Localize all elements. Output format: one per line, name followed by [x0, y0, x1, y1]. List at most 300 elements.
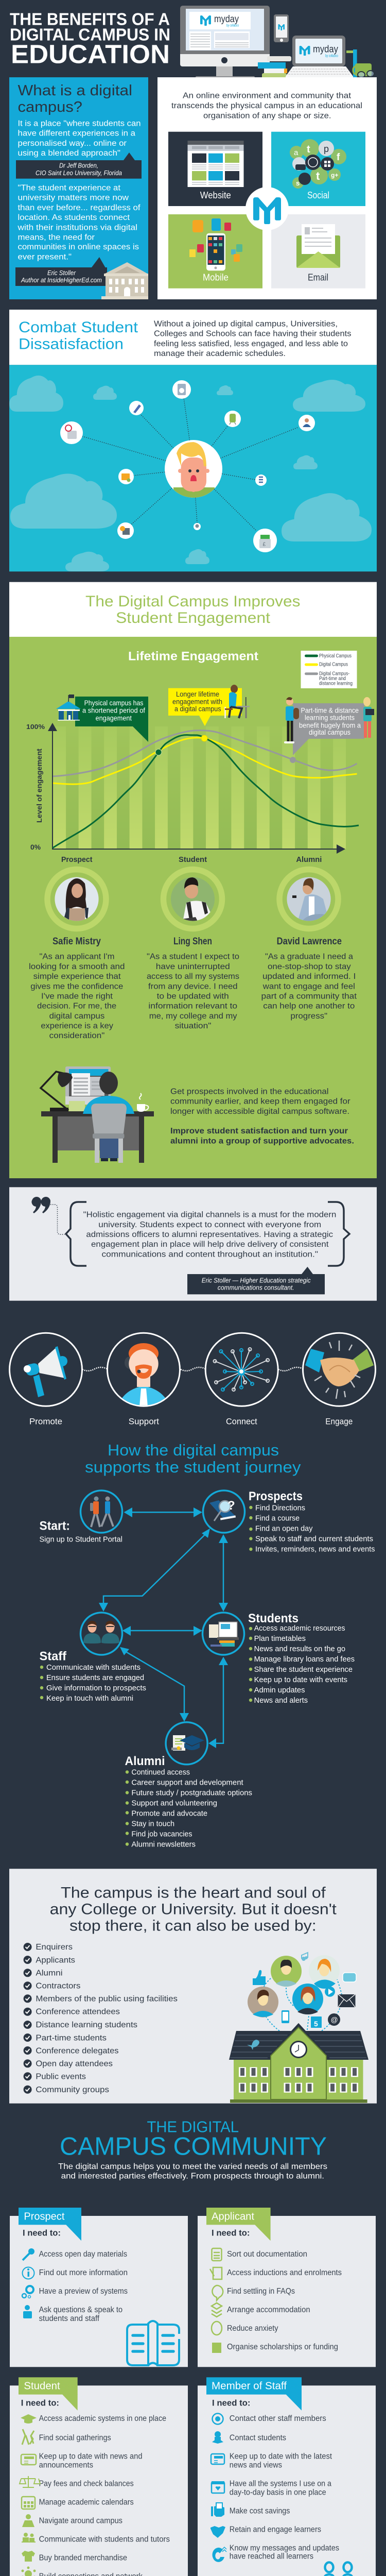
- card: member of staff: [198, 2377, 376, 2576]
- callout: part-time and distance: Part-time & distance: [301, 706, 359, 714]
- list: applicant needs: Reduce anxiety: [227, 2324, 278, 2333]
- icon: megaphone: [9, 1333, 82, 1406]
- icon: support agent: [107, 1333, 180, 1406]
- callout: Dr Jeff Borden: [16, 152, 142, 179]
- text block: staff: Staff: [39, 1650, 67, 1664]
- icon: train: [224, 411, 241, 427]
- panel: engagement heading: [9, 582, 377, 637]
- dotted connector: [50, 1205, 65, 1234]
- quote: experience is a key: [41, 1022, 113, 1030]
- list: student needs: [39, 2414, 170, 2576]
- list: prospect needs: Ask questions & speak to: [39, 2306, 122, 2314]
- label: I need to: I need to:: [212, 2398, 250, 2408]
- list: student needs: Manage academic calendars: [39, 2498, 134, 2507]
- tile: email: [271, 214, 365, 289]
- tile: website: Website: [200, 190, 231, 200]
- panel: online environment: [157, 77, 377, 299]
- name: Ling Shen: [173, 936, 212, 947]
- icons: staff needs: [210, 2413, 226, 2562]
- text block: prospects: [249, 1489, 375, 1554]
- panel: lifetime engagement: [9, 637, 377, 1178]
- title: DIGITAL CAMPUS IN: [10, 25, 170, 44]
- portrait: [47, 870, 106, 928]
- card: prospect: [10, 2208, 188, 2367]
- text block: alumni: Promote and advocate: [131, 1809, 207, 1818]
- text block: get prospects involved: longer with accessible digital campus software.: [170, 1107, 349, 1116]
- text block: student experience quote: ever present.": [17, 252, 72, 261]
- icon: pencil: [129, 401, 144, 415]
- icon: student with backpack: [284, 697, 299, 743]
- quote: [147, 953, 239, 1030]
- stage labels: Student: [179, 855, 207, 864]
- heading: digital campus improves student engagement: Student Engagement: [116, 609, 271, 626]
- icon: money wallet: £: [262, 542, 266, 547]
- axes: [26, 723, 345, 854]
- legend: Part-time and: [319, 675, 346, 682]
- node: start: [80, 1490, 122, 1533]
- list: staff needs: Contact other staff members: [230, 2414, 326, 2423]
- text block: Borden quote: have different experiences in a: [17, 129, 135, 138]
- flow arrowheads: [99, 1507, 228, 1748]
- checklist: Contractors: [36, 1982, 80, 1991]
- list: student needs: Buy branded merchandise: [39, 2554, 127, 2563]
- text block: prospects: Find Directions: [255, 1504, 305, 1513]
- quote: digital campus: [49, 1012, 105, 1021]
- tag: student: [19, 2377, 78, 2411]
- list: student needs: Navigate around campus: [39, 2517, 122, 2526]
- icon: washing machine: [172, 380, 191, 399]
- hero illustration: devices: by collabco: [226, 24, 239, 28]
- text block: prospects: Invites, reminders, news and events: [255, 1545, 375, 1554]
- heading: digital campus improves student engagement: [85, 593, 301, 626]
- callout: digital campus: [168, 688, 242, 726]
- name: David Lawrence: [277, 936, 342, 947]
- hero illustration: devices: [180, 6, 374, 79]
- callout: physical campus: Physical campus has: [84, 699, 143, 707]
- heading: combat student dissatisfaction: Dissatisfaction: [19, 335, 124, 352]
- tag: student: Student: [24, 2380, 60, 2392]
- chart markers: [155, 735, 296, 763]
- text block: community intro: and interested parties effectively. From prospects through to alumni.: [61, 2172, 324, 2180]
- heading: the digital campus community: [60, 2117, 327, 2161]
- axes: Level of engagement: [35, 749, 43, 823]
- heading: student journey: [85, 1441, 301, 1476]
- list: applicant needs: Find settling in FAQs: [227, 2287, 295, 2296]
- stage labels: Alumni: [296, 855, 322, 864]
- text block: prospects: Speak to staff and current students: [255, 1535, 373, 1544]
- text block: student experience quote: location. As students connect: [17, 213, 130, 222]
- curve: digital campus: [53, 738, 357, 784]
- text block: student experience quote: means, the need for: [17, 233, 95, 242]
- text block: students: Plan timetables: [254, 1634, 306, 1643]
- text block: get prospects involved: alumni into a group of supportive advocates.: [170, 1137, 354, 1145]
- quote: gives me the confidence: [30, 982, 123, 991]
- callout: physical campus: a shortened period of: [82, 706, 145, 715]
- text block: without a joined up campus: feeling less satisfied, less engaged, and less able to: [154, 340, 348, 348]
- tag: member of staff: Member of Staff: [212, 2380, 287, 2392]
- quote: have uninterrupted: [156, 962, 230, 971]
- legend: distance learning: [319, 680, 353, 686]
- legend: [301, 651, 357, 688]
- quote: access to all my systems: [147, 972, 239, 981]
- text block: Borden quote: using a blended approach": [17, 149, 120, 158]
- icon: calendar and clock: [60, 421, 83, 444]
- tag: prospect: Prospect: [24, 2211, 65, 2222]
- quote: consideration": [49, 1031, 104, 1040]
- checklist: Members of the public using facilities: [36, 1995, 178, 2004]
- illustration: person at desk: [41, 1066, 154, 1163]
- text block: definition: transcends the physical campus in an educational: [171, 101, 362, 110]
- list: staff needs: Contact students: [230, 2434, 286, 2443]
- text block: prospects: Find an open day: [255, 1524, 313, 1533]
- tile: social: p: [324, 144, 329, 154]
- panel: combat student dissatisfaction: [9, 310, 377, 365]
- label: support: Support: [129, 1416, 159, 1426]
- heading: what is a digital campus: [17, 82, 132, 115]
- quote: me, my college and my: [149, 1012, 237, 1021]
- list: student needs: Communicate with students and tutors: [39, 2535, 170, 2544]
- tile: social: g+: [331, 172, 338, 179]
- quote: situation": [175, 1022, 211, 1030]
- text block: staff: Communicate with students: [46, 1663, 141, 1672]
- hero illustration: devices: by collabco: [325, 55, 338, 58]
- tile: social: [271, 132, 365, 206]
- list: prospect needs: students and staff: [39, 2314, 100, 2323]
- quote: from any device. I need: [148, 982, 238, 991]
- callout: digital campus: Longer lifetime: [176, 690, 219, 698]
- curve: physical campus: [52, 735, 359, 848]
- list: applicant needs: Arrange accommodation: [227, 2306, 310, 2314]
- axes: 0%: [30, 843, 41, 851]
- icon: stressed student: [165, 440, 222, 500]
- text block: community intro: The digital campus helps you to meet the varied needs of all members: [58, 2162, 327, 2171]
- text block: holistic quote: communications and content throughout an institution.": [102, 1250, 318, 1259]
- heading: the digital campus community: THE DIGITAL: [147, 2117, 239, 2136]
- node: prospects: [203, 1490, 245, 1533]
- list: staff needs: Retain and engage learners: [230, 2525, 321, 2534]
- community connections: [263, 1978, 342, 2031]
- tile: social: t: [316, 170, 320, 182]
- stage labels: [61, 855, 322, 864]
- checklist: Alumni: [36, 1969, 63, 1978]
- portrait: [164, 870, 222, 928]
- text block: staff: Give information to prospects: [46, 1684, 146, 1692]
- heading: the digital campus community: CAMPUS COMMUNITY: [60, 2133, 327, 2161]
- label: engage: Engage: [325, 1416, 353, 1426]
- curve: digital part-time: [53, 731, 357, 776]
- list: staff needs: news and views: [230, 2461, 282, 2470]
- persona: Ling Shen: [147, 870, 239, 1030]
- callout: Eric Stoller consultant: communications consultant.: [218, 1284, 294, 1292]
- list: staff needs: Keep up to date with the latest: [230, 2452, 332, 2461]
- text block: without a joined up campus: Colleges and Schools can face having their students: [154, 330, 352, 338]
- illustration: campus building with community: [229, 1953, 369, 2103]
- list: student needs: announcements: [39, 2461, 93, 2470]
- dotted connectors: [82, 398, 297, 531]
- callout: Eric Stoller consultant: [187, 1267, 325, 1294]
- icon: people: [299, 415, 315, 431]
- icon: email task: [117, 522, 134, 539]
- chart: level of engagement: [26, 723, 359, 864]
- icon: list: [255, 474, 267, 486]
- heading: combat student dissatisfaction: Combat Student: [19, 319, 138, 336]
- text block: students: News and results on the go: [254, 1645, 345, 1653]
- connector: dotted waves: [82, 1367, 303, 1371]
- callout: part-time and distance: digital campus: [309, 728, 350, 736]
- quote: want to engage and feel: [262, 982, 355, 991]
- list: prospect needs: Access open day materials: [39, 2250, 127, 2259]
- list: student needs: Keep up to date with news and: [39, 2452, 142, 2461]
- title: EDUCATION: [11, 40, 170, 69]
- checklist: [24, 1943, 178, 2094]
- label: I need to: I need to:: [23, 2228, 61, 2238]
- checklist: Community groups: [36, 2086, 109, 2094]
- quote: information relevant to: [148, 1002, 237, 1011]
- tile: social: t: [307, 144, 310, 155]
- text block: holistic quote: engagement plan in place will help drive delivery of consistent: [91, 1240, 329, 1249]
- text block: alumni: Support and volunteering: [131, 1799, 217, 1807]
- text block: prospects: Prospects: [249, 1489, 303, 1503]
- list: staff needs: Make cost savings: [230, 2506, 290, 2515]
- stage labels: Prospect: [61, 855, 93, 864]
- text block: staff: Keep in touch with alumni: [46, 1694, 133, 1703]
- heading: digital campus improves student engagement: The Digital Campus Improves: [85, 593, 301, 610]
- list: prospect needs: [39, 2250, 128, 2323]
- icon: group of people: [314, 2563, 363, 2576]
- list: staff needs: Know my messages and updates: [230, 2544, 339, 2552]
- tile: social: a: [294, 148, 299, 157]
- node: alumni: [166, 1722, 207, 1765]
- title: THE BENEFITS OF A: [10, 9, 170, 28]
- heading: combat student dissatisfaction: [19, 319, 138, 352]
- panel: holistic engagement quote: [9, 1187, 377, 1301]
- heading: student journey: How the digital campus: [108, 1441, 279, 1459]
- text block: holistic quote: "Holistic engagement via digital channels is a must for the modern: [83, 1211, 336, 1219]
- text block: students: Share the student experience: [254, 1665, 353, 1674]
- persona: Safie Mistry: [29, 870, 125, 1040]
- list: prospect needs: Have a preview of systems: [39, 2287, 128, 2296]
- persona: David Lawrence: [261, 870, 357, 1021]
- text block: staff: [39, 1650, 146, 1703]
- flow diagram: [39, 1489, 375, 1849]
- checklist: Applicants: [36, 1956, 75, 1964]
- quote: I've made the right: [41, 992, 113, 1001]
- text block: students: Students: [248, 1612, 299, 1625]
- tile: website: [168, 132, 262, 206]
- text block: student experience quote: "The student experience at: [17, 183, 121, 192]
- icon: woman at laptop: [224, 685, 250, 718]
- icon: cloud: [194, 523, 201, 530]
- tile: social: f: [337, 152, 340, 163]
- text block: Borden quote: It is a place "where students can: [17, 119, 141, 128]
- clouds: [9, 376, 372, 571]
- checklist: Enquirers: [36, 1943, 73, 1952]
- tag: applicant: Applicant: [212, 2211, 254, 2222]
- callout: part-time and distance: learning students: [305, 714, 355, 722]
- callout: physical campus: [75, 697, 148, 742]
- text block: alumni: [125, 1754, 252, 1849]
- quote: decision. For me, the: [37, 1002, 116, 1011]
- list: applicant needs: Organise scholarships or funding: [227, 2343, 338, 2351]
- legend: Digital Campus: [319, 662, 348, 668]
- small icons: @: [330, 2015, 338, 2024]
- callout: Eric Stoller: Eric Stoller: [47, 269, 76, 277]
- text block: students: Access academic resources: [254, 1624, 345, 1633]
- list: staff needs: Have all the systems I use on a: [230, 2480, 331, 2488]
- icon: open book: [127, 2321, 179, 2365]
- panel: what is a digital campus: [9, 77, 148, 299]
- heading: campus heart and soul: stop there, it can also be used by:: [69, 1917, 317, 1934]
- text block: students: News and alerts: [254, 1696, 308, 1705]
- small icons: 5: [314, 2020, 318, 2028]
- text block: holistic quote: university. Students expect to connect with everyone from: [98, 1221, 321, 1229]
- heading: campus heart and soul: any College or University. But it doesn't: [50, 1901, 337, 1918]
- text block: get prospects involved: Improve student satisfaction and turn your: [170, 1127, 348, 1136]
- text block: without a joined up campus: [154, 319, 352, 358]
- callout: part-time and distance: [293, 703, 364, 755]
- icons: applicant needs: [210, 2248, 223, 2353]
- list: prospect needs: Find out more information: [39, 2268, 128, 2277]
- text block: holistic quote: admissions officers to alumni representatives. Having a strategic: [86, 1230, 333, 1239]
- text block: Borden quote: personalised way... online or: [17, 139, 127, 148]
- checklist: Distance learning students: [36, 2021, 137, 2029]
- text block: staff: Ensure students are engaged: [46, 1673, 144, 1682]
- text block: without a joined up campus: Without a joined up digital campus, Universities,: [154, 319, 338, 328]
- quote: updated and informed. I: [262, 972, 356, 981]
- heading: campus heart and soul: The campus is the heart and soul of: [61, 1884, 326, 1901]
- tile: social: s: [296, 179, 300, 187]
- quote: to be updated with: [157, 992, 229, 1001]
- text block: get prospects involved: Get prospects involved in the educational: [170, 1087, 328, 1096]
- flow arrows: [103, 1512, 223, 1743]
- axes: 100%: [26, 723, 45, 731]
- icon: connect network: [205, 1333, 278, 1406]
- text block: student experience quote: with their institutions via digital: [17, 223, 137, 232]
- card: student: [10, 2377, 188, 2576]
- name: Safie Mistry: [52, 936, 101, 947]
- text block: alumni: Continued access: [131, 1768, 190, 1776]
- icon: money wallet: [253, 529, 277, 552]
- text block: holistic quote: [83, 1211, 336, 1259]
- portrait: [279, 870, 338, 928]
- text block: community intro: [58, 2162, 327, 2180]
- list: applicant needs: Access inductions and enrolments: [227, 2268, 342, 2277]
- text block: alumni: Stay in touch: [131, 1819, 174, 1828]
- icon: handshake: [303, 1333, 376, 1406]
- text block: alumni: Alumni: [125, 1754, 165, 1768]
- icons: prospect needs: [22, 2248, 34, 2318]
- icon: campus building: [56, 694, 81, 720]
- callout: digital campus: engagement with: [172, 697, 222, 705]
- quote: simple experience that: [33, 972, 121, 981]
- callout: Dr Jeff Borden: CIO Saint Leo University, Florida: [36, 170, 122, 177]
- panel: campus used by: [9, 1869, 377, 2104]
- panel: student surrounded by scattered systems: [9, 365, 377, 571]
- checklist: Open day attendees: [36, 2060, 113, 2069]
- tag: prospect: [19, 2208, 81, 2241]
- node: students: [203, 1613, 244, 1655]
- text block: students: Keep up to date with events: [254, 1675, 347, 1684]
- text block: alumni: Future study / postgraduate options: [131, 1788, 252, 1797]
- checklist: Conference attendees: [36, 2008, 120, 2016]
- text block: Borden quote: [17, 119, 141, 158]
- tag: applicant: [206, 2208, 271, 2241]
- quote: "As a graduate I need a: [265, 953, 353, 961]
- text block: get prospects involved: community earlier, and keep them engaged for: [170, 1097, 350, 1106]
- icon: folder: [118, 469, 134, 484]
- text block: get prospects involved: [170, 1087, 354, 1145]
- title: [10, 9, 170, 69]
- icon: student with tablet: [363, 697, 374, 738]
- hero illustration: devices: myday: [313, 44, 338, 55]
- list: staff needs: day-to-day basis in one place: [230, 2488, 326, 2497]
- label: I need to: I need to:: [21, 2398, 59, 2408]
- quote brackets: [66, 1202, 349, 1266]
- list: staff needs: have reached all learners: [230, 2552, 313, 2561]
- text block: definition: An online environment and community that: [183, 92, 352, 100]
- node: staff: [80, 1613, 122, 1655]
- icon: quote marks: [31, 1197, 50, 1213]
- callout: Dr Jeff Borden: Dr Jeff Borden,: [59, 162, 98, 170]
- text block: student experience quote: [17, 183, 141, 261]
- heading: what is a digital campus: What is a digital: [17, 82, 132, 99]
- callout: physical campus: engagement: [96, 714, 132, 722]
- text block: alumni: Alumni newsletters: [131, 1840, 196, 1849]
- quote: progress": [290, 1012, 327, 1021]
- heading: lifetime engagement: Lifetime Engagement: [128, 650, 258, 664]
- list: student needs: Access academic systems in one place: [39, 2414, 166, 2423]
- card: applicant: [198, 2208, 376, 2367]
- quote: "As an applicant I'm: [39, 953, 114, 961]
- text block: student experience quote: university matters more now: [17, 194, 129, 202]
- label: I need to: I need to:: [212, 2228, 250, 2238]
- chart stripes: [53, 726, 346, 849]
- list: applicant needs: Sort out documentation: [227, 2250, 307, 2259]
- text block: students: Manage library loans and fees: [254, 1655, 355, 1664]
- heading: what is a digital campus: campus?: [17, 99, 82, 115]
- legend: Physical Campus: [319, 653, 352, 659]
- tile: email: Email: [308, 273, 328, 283]
- text block: students: Admin updates: [254, 1686, 305, 1694]
- text block: without a joined up campus: manage their academic schedules.: [154, 349, 286, 358]
- text block: definition: [171, 92, 362, 120]
- text block: alumni: Find job vacancies: [131, 1829, 192, 1838]
- text block: alumni: Career support and development: [131, 1778, 243, 1787]
- quote: [261, 953, 357, 1021]
- label: promote: Promote: [29, 1416, 62, 1426]
- list: student needs: Find social gatherings: [39, 2434, 111, 2443]
- quote: part of a community that: [261, 992, 357, 1001]
- icons: student needs: [20, 2414, 40, 2576]
- text block: prospects: Find a course: [255, 1514, 300, 1523]
- hero illustration: devices: myday: [214, 14, 239, 25]
- text block: student experience quote: than ever before... regardless of: [17, 204, 141, 212]
- quote: can help one another to: [263, 1002, 355, 1011]
- text block: definition: organisation of any shape or size.: [203, 111, 331, 120]
- quote: one-stop-shop to stay: [268, 962, 351, 971]
- checklist: Public events: [36, 2073, 86, 2081]
- callout: Eric Stoller: [15, 257, 107, 286]
- list: student needs: Pay fees and check balances: [39, 2480, 134, 2488]
- icon: university building: [101, 262, 148, 299]
- text block: students: [248, 1612, 355, 1705]
- building: [229, 2023, 369, 2103]
- legend: Digital Campus-: [319, 671, 349, 677]
- tile: mobile: Mobile: [203, 273, 229, 283]
- callout: Eric Stoller: Author at InsideHigherEd.com: [21, 277, 102, 284]
- text block: student experience quote: communities in online spaces is: [17, 243, 139, 251]
- node: prospects: ?: [227, 1499, 235, 1513]
